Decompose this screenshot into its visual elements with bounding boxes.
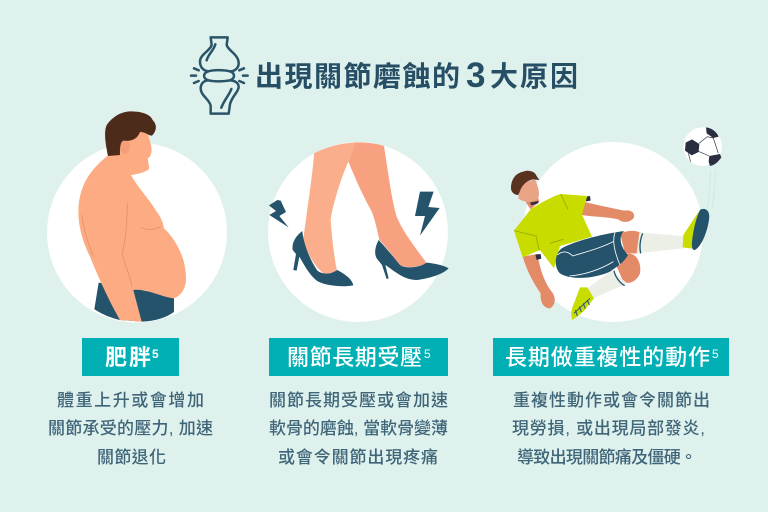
label: obesity: 5 [152, 347, 159, 361]
text: repetitive movements description: 重複性動作或會令關節出 [513, 390, 710, 410]
hair [105, 111, 156, 156]
raised boot sole [692, 209, 709, 250]
ball trail [707, 170, 715, 207]
label: repetitive movements: 5 [712, 347, 719, 361]
collar [530, 201, 539, 205]
icon: knee joint [191, 37, 248, 114]
ear [120, 141, 130, 154]
raised sock [637, 233, 683, 253]
text: repetitive movements description: 現勞損, 或出現局部發炎, [512, 419, 705, 438]
label: obesity: 肥胖 [105, 345, 151, 370]
right lightning bolt [415, 192, 440, 236]
left shoe [292, 231, 353, 286]
text: obesity description [48, 391, 213, 467]
soccer ball [683, 127, 722, 166]
title [255, 56, 578, 95]
lower boot [571, 287, 594, 320]
label: long-term joint pressure: 5 [424, 347, 431, 361]
back arm [582, 202, 634, 222]
body creases [82, 203, 161, 287]
title: 出現關節磨蝕的 [255, 61, 460, 92]
panel: soccer player illustration [511, 127, 722, 322]
boot studs [574, 298, 590, 316]
torso and head [78, 130, 186, 322]
raised boot [683, 212, 699, 249]
text: joint pressure description [269, 391, 448, 467]
label: repetitive movements [493, 338, 729, 376]
label: obesity [82, 338, 179, 376]
left lightning bolt [269, 200, 289, 227]
title: 3 [466, 56, 485, 95]
panel: legs in high heels illustration [268, 142, 449, 322]
shorts [556, 231, 628, 278]
shorts piping [557, 232, 620, 276]
neck [523, 192, 539, 209]
text: repetitive movements description [512, 390, 710, 467]
sleeve bands [535, 196, 591, 260]
text: joint pressure description: 軟骨的磨蝕, 當軟骨變薄 [269, 418, 448, 438]
text: repetitive movements description: 導致出現關節痛及僵硬。 [517, 448, 697, 467]
right shoe [375, 240, 449, 280]
head [518, 179, 539, 202]
text: obesity description: 關節退化 [97, 448, 166, 467]
raised leg thigh and knee [620, 231, 642, 253]
left leg [303, 142, 355, 274]
right leg [348, 142, 427, 267]
shirt [514, 194, 592, 268]
shirt creases [514, 194, 568, 251]
text: obesity description: 體重上升或會增加 [57, 391, 204, 410]
panel: obesity illustration [47, 111, 227, 322]
lower sock [587, 271, 627, 298]
text: obesity description: 關節承受的壓力, 加速 [48, 419, 213, 438]
text: joint pressure description: 或會令關節出現疼痛 [278, 447, 438, 467]
sock stripes [614, 233, 643, 286]
shorts [94, 283, 174, 322]
label: repetitive movements: 長期做重複性的動作 [505, 345, 710, 370]
label: long-term joint pressure: 關節長期受壓 [287, 345, 422, 370]
hair [511, 171, 539, 195]
text: joint pressure description: 關節長期受壓或會加速 [269, 391, 448, 410]
label: long-term joint pressure [269, 338, 448, 376]
lower knee [617, 253, 640, 283]
title: 大原因 [490, 61, 578, 92]
left arm [523, 254, 555, 308]
